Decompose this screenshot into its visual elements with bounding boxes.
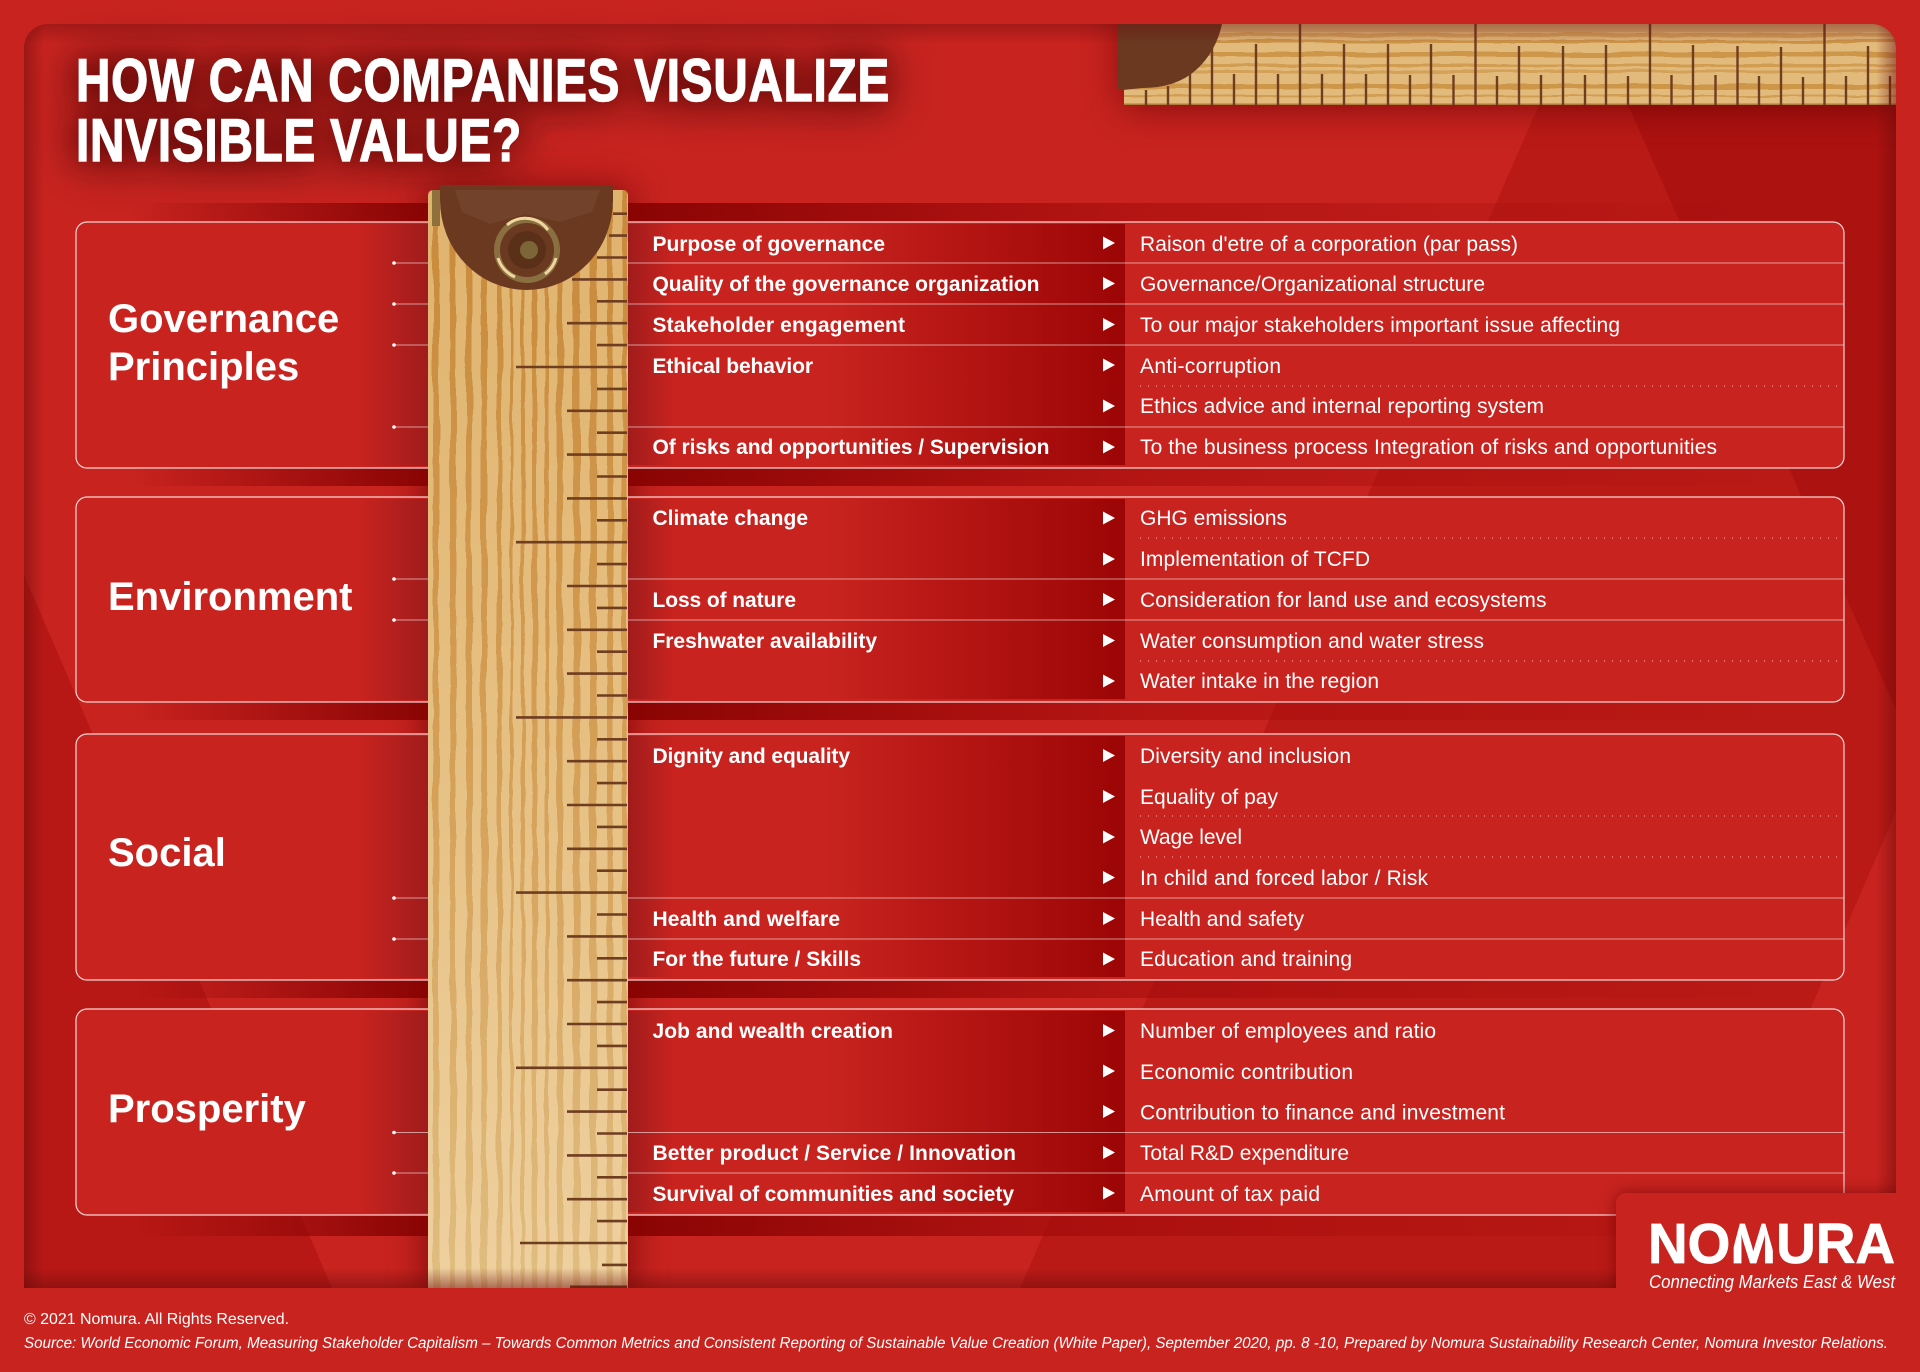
panel: prosperity: Better product / Service / Innovation: [652, 1142, 1016, 1165]
footer copyright: © 2021 Nomura. All Rights Reserved.: [24, 1311, 289, 1328]
panel: prosperity: Total R&D expenditure: [1140, 1142, 1349, 1165]
panel: governance principles: Stakeholder engagement: [652, 314, 905, 337]
panel: governance principles: To our major stakeholders important issue affecting: [1140, 314, 1620, 337]
panel: governance principles: Raison d'etre of a corporation (par pass): [1140, 233, 1518, 256]
panel: governance principles: Purpose of governance: [652, 233, 885, 256]
panel: environment: GHG emissions: [1140, 507, 1287, 530]
panel: environment: Loss of nature: [652, 589, 796, 612]
panel: social: Dignity and equality: [652, 745, 850, 768]
panel: governance principles: [76, 222, 1844, 468]
vertical wooden ruler: [428, 180, 628, 1300]
panel: environment: [76, 497, 1844, 702]
panel: environment: Consideration for land use and ecosystems: [1140, 589, 1546, 612]
panel: social: Education and training: [1140, 948, 1352, 971]
panel: social: Health and welfare: [652, 908, 840, 931]
panel: prosperity: Number of employees and ratio: [1140, 1020, 1436, 1043]
logo block: [1604, 1182, 1896, 1292]
panel: prosperity: Contribution to finance and investment: [1140, 1102, 1505, 1124]
panel: governance principles: Ethics advice and internal reporting system: [1140, 395, 1544, 418]
title: HOW CAN COMPANIES VISUALIZE: [76, 47, 890, 114]
panel: environment: Water consumption and water stress: [1140, 630, 1484, 653]
logo block: NOMURA: [1648, 1212, 1895, 1276]
title: INVISIBLE VALUE?: [76, 107, 522, 174]
panel: social: For the future / Skills: [652, 948, 861, 971]
logo block: Connecting Markets East & West: [1649, 1272, 1896, 1292]
panel: governance principles: Of risks and opportunities / Supervision: [652, 436, 1050, 459]
panel: environment: Water intake in the region: [1140, 670, 1379, 693]
panel: social: In child and forced labor / Risk: [1140, 867, 1428, 890]
panel: prosperity: Prosperity: [108, 1087, 307, 1131]
panel: environment: Climate change: [652, 507, 808, 530]
panel: environment: Environment: [108, 575, 352, 619]
panel: social: [76, 734, 1844, 980]
panel: social: Health and safety: [1140, 908, 1304, 931]
panel: social: Social: [108, 831, 226, 875]
panel: prosperity: Survival of communities and society: [652, 1183, 1014, 1206]
panel: prosperity: Job and wealth creation: [652, 1020, 893, 1043]
panel: governance principles: Quality of the governance organization: [652, 273, 1040, 296]
icon: top hinge: [1118, 24, 1222, 90]
panel: governance principles: Ethical behavior: [652, 355, 813, 378]
top wooden ruler: [1110, 24, 1910, 105]
panel: prosperity: Amount of tax paid: [1140, 1183, 1320, 1206]
panel: social: Diversity and inclusion: [1140, 745, 1351, 768]
panel: environment: Freshwater availability: [652, 630, 877, 653]
panel: prosperity: Economic contribution: [1140, 1061, 1353, 1084]
panel: governance principles: Governance/Organizational structure: [1140, 273, 1485, 296]
panel: social: Wage level: [1140, 826, 1242, 849]
panel: prosperity: [76, 1009, 1844, 1215]
panel: social: Equality of pay: [1140, 786, 1278, 809]
title: [76, 47, 890, 174]
panel: environment: Implementation of TCFD: [1140, 548, 1370, 571]
panel: governance principles: To the business process Integration of risks and opportunities: [1140, 436, 1717, 459]
footer source note: Source: World Economic Forum, Measuring Stakeholder Capitalism – Towards Common Metrics and Consistent Reporting of Sustainable Value Creation (White Paper), September 2020, pp. 8 -10, Prepared by Nomura Sustainability Research Center, Nomura Investor Relations.: [24, 1335, 1888, 1352]
panel: governance principles: Governance: [108, 297, 339, 341]
panel: governance principles: Principles: [108, 345, 299, 389]
panel: governance principles: Anti-corruption: [1140, 355, 1281, 378]
shadow bands behind panels: [130, 203, 1844, 1236]
icon: brass half-disc hinge with screw: [440, 185, 613, 290]
